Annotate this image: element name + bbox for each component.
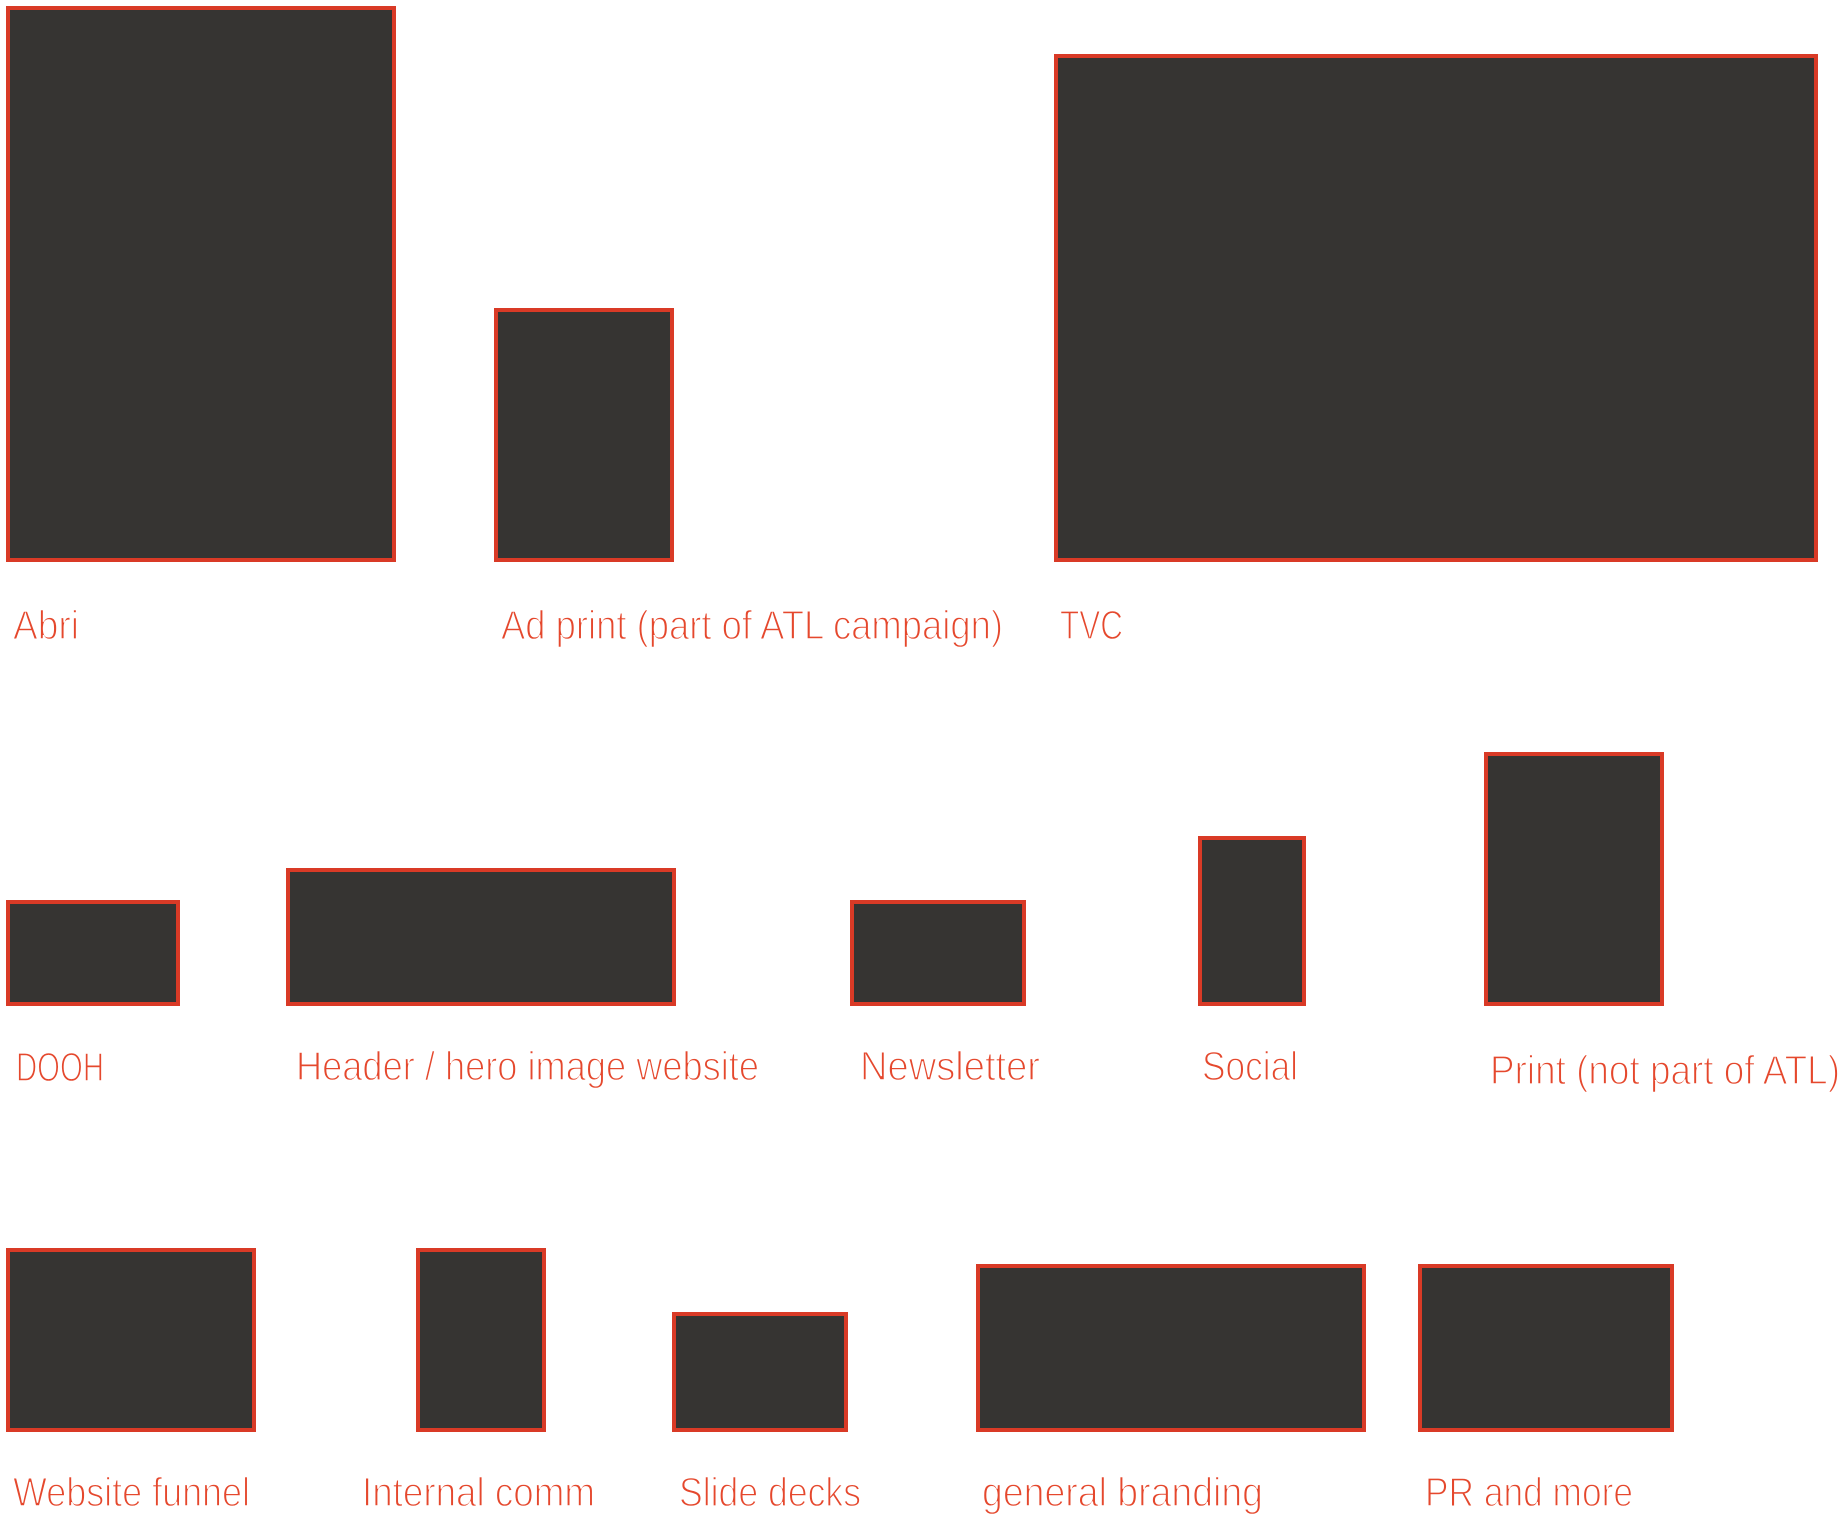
box: Slide decks xyxy=(674,1314,846,1430)
tile: Newsletter xyxy=(852,902,1040,1089)
label: Internal comm: Internal comm xyxy=(362,1469,595,1515)
label: Slide decks: Slide decks xyxy=(679,1469,861,1515)
label: Abri: Abri xyxy=(13,602,79,648)
box: Print xyxy=(1486,754,1662,1004)
tile: general branding xyxy=(978,1266,1364,1515)
label: Newsletter: Newsletter xyxy=(860,1043,1040,1089)
box: Website funnel xyxy=(8,1250,254,1430)
box: Abri xyxy=(8,8,394,560)
tile: Internal comm xyxy=(362,1250,595,1515)
tile: DOOH xyxy=(8,902,178,1090)
tile: Ad print xyxy=(496,310,1003,648)
box: PR and more xyxy=(1420,1266,1672,1430)
label: Header / hero image website: Header / hero image website xyxy=(296,1043,759,1089)
box: Ad print xyxy=(496,310,672,560)
tile: Slide decks xyxy=(674,1314,861,1515)
tile: Abri xyxy=(8,8,394,648)
label: general branding: general branding xyxy=(982,1469,1263,1515)
tile: Header / hero image website xyxy=(288,870,759,1089)
tile: TVC xyxy=(1056,56,1816,648)
label: Social: Social xyxy=(1202,1043,1298,1089)
label: Website funnel: Website funnel xyxy=(13,1469,250,1515)
tile: PR and more xyxy=(1420,1266,1672,1515)
box: TVC xyxy=(1056,56,1816,560)
label: TVC: TVC xyxy=(1060,602,1123,648)
tile: Website funnel xyxy=(8,1250,254,1515)
label: PR and more: PR and more xyxy=(1425,1469,1633,1515)
box: DOOH xyxy=(8,902,178,1004)
box: Header / hero image website xyxy=(288,870,674,1004)
label: Ad print: Ad print (part of ATL campaign) xyxy=(501,602,1003,648)
tile: Print xyxy=(1486,754,1840,1093)
tile: Social xyxy=(1200,838,1304,1089)
label: DOOH: DOOH xyxy=(16,1044,104,1090)
box: Internal comm xyxy=(418,1250,544,1430)
box: general branding xyxy=(978,1266,1364,1430)
box: Newsletter xyxy=(852,902,1024,1004)
box: Social xyxy=(1200,838,1304,1004)
